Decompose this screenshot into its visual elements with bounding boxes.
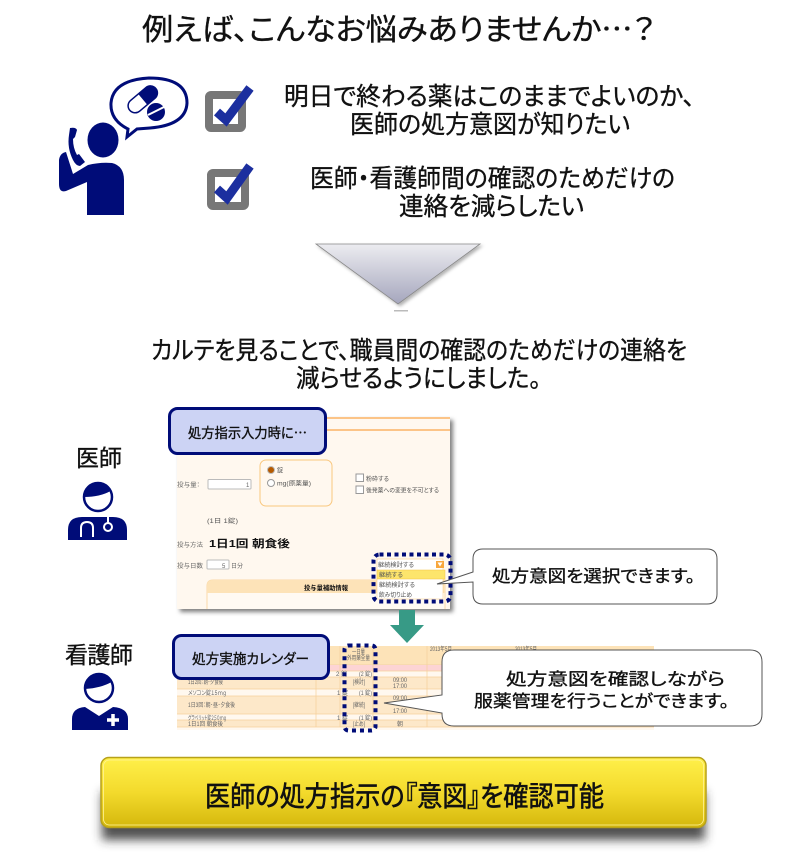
form: dose fields: mg(原薬量) [277,480,311,488]
table rows: 2013年5月 [515,645,537,653]
text: concern 2: 医師・看護師間の確認のためだけの [310,165,675,193]
text: concern 1: 明日で終わる薬はこのままでよいのか、 [284,83,695,111]
icon: doctor [68,483,127,540]
callout: check intent [384,650,762,726]
form: dose fields: 粉砕する [366,475,389,483]
table rows: 17:00 [393,684,408,690]
table rows: 09:00 [393,696,408,702]
table rows: (1 錠) [359,689,372,697]
table rows: 17:00 [393,709,408,715]
banner: conclusion [101,758,706,840]
table rows: [継続] [353,701,365,709]
icon: speech bubble with pills [111,78,187,137]
form: dose fields: (1日 1錠) [207,517,238,525]
table rows: 2013年5月 [430,645,452,653]
table rows: 1日3回：朝･昼･夕食後 [188,701,235,709]
banner: conclusion: 医師の処方指示の『意図』を確認可能 [205,781,604,812]
icon: person [59,122,124,215]
arrow: down triangle [316,244,480,312]
form: auxiliary information box: 投与量補助情報 [304,583,349,592]
dropdown: prescription intent: 継続する [379,571,403,579]
panel: prescription calendar [177,645,654,730]
highlight: intent column [344,646,376,730]
text: concern 2 [310,165,675,221]
form: dosing method: 日分 [231,562,243,570]
table rows: 09:00 [393,678,408,684]
form: dose fields: 1 [246,483,250,489]
label: doctor: 医師 [76,445,122,471]
text: solution statement: カルテを見ることで、職員間の確認のためだけの連絡を [151,337,687,365]
dropdown: prescription intent: 飲み切り止め [379,591,412,599]
table rows: 1日1回 朝食後 [188,720,223,728]
table rows: (2 錠) [359,670,372,678]
form: dose fields: 後発薬への変更を不可とする [366,486,439,494]
table rows: 一日量 [352,649,365,656]
text: solution statement: 減らせるようにしました。 [296,365,541,393]
callout: select intent [437,549,717,604]
icon: checkbox 1 [209,88,250,128]
table rows: 2 錠 [336,670,347,678]
label: prescription calendar [174,636,328,678]
form: dosing method [177,537,291,570]
form: dosing method: 投与方法 [177,541,203,549]
text: concern 1 [284,83,695,139]
form: auxiliary information box [207,580,445,609]
table rows: 1日2回：朝･夕食後 [188,678,223,686]
form: dosing method: 5 [222,564,226,570]
title: 例えば、こんなお悩みありませんか …？ [142,5,655,49]
table rows [188,645,537,728]
table rows: 1 錠 [337,714,348,722]
form: dosing method: 1日1回 朝食後 [209,537,291,550]
icon: nurse [72,674,128,730]
text: solution statement [151,337,687,393]
icon: person on phone with medicine speech bubble [59,78,187,215]
table rows: [止め] [353,720,365,728]
panel: prescription input screen [177,417,450,609]
form: dose fields [177,460,439,525]
label: prescription calendar: 処方実施カレンダー [192,651,309,667]
callout: select intent: 処方意図を選択できます。 [492,567,695,586]
callout: check intent: 処方意図を確認しながら [506,670,725,689]
table rows: 1 錠 [337,689,348,697]
dropdown: prescription intent: 継続検討する [378,561,414,569]
callout: check intent: 服薬管理を行うことができます。 [474,692,729,711]
form: dosing method: 投与日数 [177,562,203,570]
icon: checkbox 2 [211,166,250,206]
arrow: teal down arrow [390,610,424,643]
table rows: 朝 [397,720,403,728]
table rows: グラベリット錠２５０ｍg [188,714,226,722]
label: prescription input: 処方指示入力時に… [188,423,307,443]
text: concern 1: 医師の処方意図が知りたい [350,111,630,139]
form: dose fields: 錠 [277,466,283,474]
table rows: (1 錠) [359,714,372,722]
form: dose fields: 投与量： [177,481,200,489]
dropdown: prescription intent [374,554,450,602]
dropdown: prescription intent: 継続検討する [379,581,415,589]
table rows: 外用薬全量 [347,654,370,662]
table rows: メソコン錠１5ｍg [188,689,226,697]
label: prescription input [170,408,326,454]
text: concern 2: 連絡を減らしたい [399,193,584,221]
table rows: [検討] [353,678,365,686]
label: nurse: 看護師 [65,642,133,668]
